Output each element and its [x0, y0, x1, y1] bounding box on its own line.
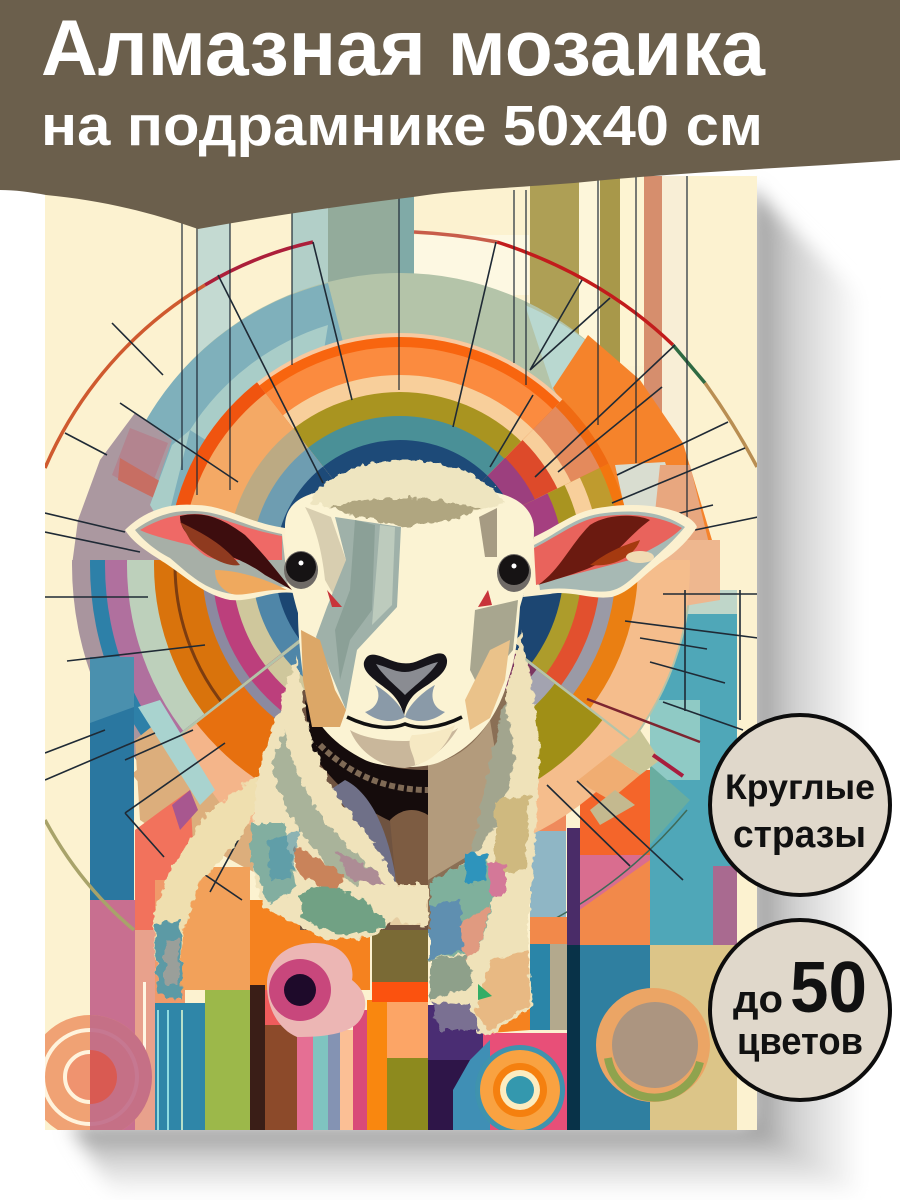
- outer thin arcs: [45, 232, 757, 931]
- canvas shadow: [70, 186, 862, 1196]
- left tan facial stripe: [305, 507, 346, 593]
- background vertical stripes: [198, 176, 662, 412]
- circle: lower left target: [45, 1015, 152, 1130]
- right teal block behind the rings: [530, 590, 737, 945]
- concentric rings: lower left sector: [134, 643, 305, 872]
- wool: right scarf: [430, 630, 540, 1037]
- wool: left scarf: [250, 655, 428, 940]
- badge: round rhinestones: стразы: [733, 814, 866, 856]
- title line 1: Алмазная мозаика: [41, 3, 766, 92]
- concentric rings: lower right sector: [505, 654, 628, 834]
- concentric rings: upper right sector B: [523, 464, 624, 540]
- lower left cheek: [301, 630, 346, 727]
- lower geometric blocks: [135, 828, 737, 1130]
- forehead grey patch: [479, 508, 497, 557]
- title line 2: на подрамнике 50х40 см: [41, 94, 763, 158]
- wool: left arm drape: [153, 775, 257, 1000]
- green wool triangle: [478, 984, 492, 1000]
- concentric rings: upper left sector: [176, 382, 333, 528]
- circle: pink target: [267, 943, 365, 1037]
- decorative circles: [28, 943, 710, 1139]
- right cheek shading: [470, 600, 518, 680]
- concentric rings: upper right sector A: [482, 400, 608, 505]
- right ring patches: [577, 730, 660, 825]
- badge: up to 50 colours: цветов: [737, 1021, 863, 1063]
- radial thin lines: [45, 176, 758, 900]
- circle: orange target: [480, 1045, 565, 1130]
- nose and mouth: [347, 653, 462, 727]
- title banner: [0, 0, 900, 229]
- big outer ring: [72, 273, 720, 740]
- badge: up to 50 colours: 50: [790, 948, 867, 1028]
- badge: round rhinestones: Круглые: [725, 768, 875, 807]
- badge: round rhinestones: [710, 715, 890, 895]
- red marks under eyes: [327, 590, 342, 607]
- left ear: [125, 505, 294, 600]
- right eye: [497, 554, 531, 592]
- left lower patches: [90, 657, 225, 1130]
- right ear: [523, 505, 697, 598]
- badge: up to 50 colours: до: [733, 979, 783, 1021]
- concentric rings: left sector: [72, 560, 300, 760]
- wool crown: [309, 460, 505, 527]
- grey facial stripes: [316, 517, 401, 710]
- chest: dark neck and brown centre: [300, 690, 518, 930]
- head: [284, 460, 534, 768]
- circle: brown disc: [596, 988, 710, 1102]
- concentric rings: top sector: [257, 333, 562, 482]
- painting: sheep mosaic artwork: [28, 176, 758, 1139]
- face base: [285, 490, 534, 767]
- concentric rings: right sector: [516, 572, 687, 738]
- left eye: [284, 551, 318, 589]
- badge: up to 50 colours: [710, 920, 890, 1100]
